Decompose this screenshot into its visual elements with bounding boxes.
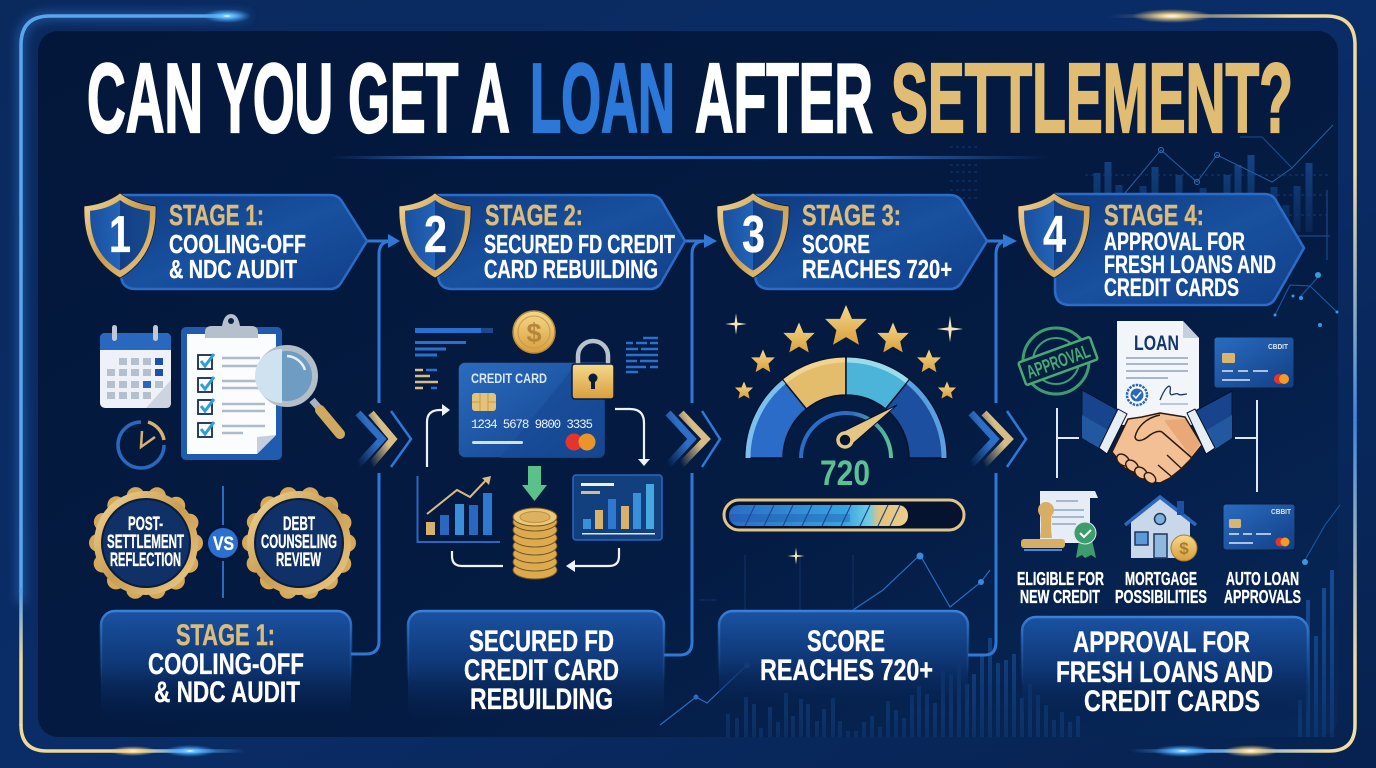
title: AFTER bbox=[695, 43, 873, 153]
icon: magnifier bbox=[255, 348, 340, 434]
brackets bbox=[1057, 400, 1257, 492]
label: eligible for new credit: NEW CREDIT bbox=[1020, 587, 1100, 607]
icon: credit card small top bbox=[1214, 337, 1294, 388]
label: eligible for new credit: ELIGIBLE FOR bbox=[1017, 569, 1104, 589]
icon: calendar bbox=[100, 325, 171, 408]
background network dots bbox=[1274, 272, 1340, 565]
icon: green down arrow bbox=[522, 466, 547, 501]
badge: post-settlement reflection: POST- bbox=[128, 514, 163, 535]
stage 3 header bbox=[717, 193, 987, 289]
icon: clipboard checklist bbox=[181, 314, 282, 460]
chart: rising bars bbox=[418, 476, 500, 542]
badge: debt counseling review bbox=[247, 491, 351, 595]
icon: loan document bbox=[1117, 321, 1199, 425]
panel: stage 2 summary: SECURED FD bbox=[469, 625, 614, 658]
panel: stage 2 summary: REBUILDING bbox=[470, 683, 613, 716]
icon: dollar coin bbox=[513, 311, 555, 353]
icon: approval stamp: APPROVAL bbox=[1024, 341, 1093, 384]
stage 4 header bbox=[1018, 193, 1304, 305]
icon: credit card: CREDIT CARD bbox=[471, 371, 547, 386]
panel: stage 1 summary: COOLING-OFF bbox=[148, 648, 304, 681]
panel: stage 1 summary: STAGE 1: bbox=[176, 619, 275, 652]
panel: stage 4 summary: CREDIT CARDS bbox=[1084, 685, 1260, 718]
label: mortgage possibilities: POSSIBILITIES bbox=[1115, 587, 1207, 607]
label: mortgage possibilities: MORTGAGE bbox=[1125, 569, 1197, 589]
data lines left bbox=[415, 328, 493, 388]
badge: post-settlement reflection: SETTLEMENT bbox=[107, 532, 184, 553]
arrows: rebuilding cycle bbox=[427, 404, 650, 572]
chevrons 3 bbox=[971, 411, 1026, 467]
stage 3 header: 3 bbox=[742, 206, 765, 264]
stage 2 header: 2 bbox=[424, 206, 447, 264]
stage 1 header: & NDC AUDIT bbox=[169, 254, 297, 284]
stage 1 header bbox=[84, 193, 367, 289]
icon: handshake bbox=[1082, 390, 1232, 486]
progress bar bbox=[724, 500, 964, 530]
stage 3 header: REACHES 720+ bbox=[802, 254, 952, 284]
chart: score gauge: 720 bbox=[820, 454, 870, 493]
icon: padlock bbox=[572, 341, 614, 399]
icon: credit card small top: CBDIT bbox=[1268, 344, 1289, 351]
icon: credit card small bottom bbox=[1223, 504, 1295, 550]
icon: house with coin: $ bbox=[1179, 539, 1189, 558]
stage 3 header: STAGE 3: bbox=[802, 200, 901, 232]
icon: certificate stamp bbox=[1021, 491, 1098, 558]
stage 2 header bbox=[399, 193, 685, 289]
stage 2 header: SECURED FD CREDIT bbox=[484, 229, 675, 259]
stage 2 header: CARD REBUILDING bbox=[484, 254, 658, 284]
stage 3 header: SCORE bbox=[802, 229, 870, 259]
vs divider: VS bbox=[213, 534, 234, 555]
data lines right bbox=[626, 338, 658, 372]
stage 4 header: STAGE 4: bbox=[1104, 200, 1204, 232]
icon: approval stamp bbox=[1018, 328, 1098, 394]
stage 4 header: CREDIT CARDS bbox=[1104, 274, 1239, 302]
icon: clock bbox=[118, 422, 164, 468]
stars bbox=[725, 305, 963, 564]
stage 4 header: FRESH LOANS AND bbox=[1104, 251, 1276, 279]
panel: stage 2 summary: CREDIT CARD bbox=[464, 654, 619, 687]
label: mortgage possibilities bbox=[1115, 569, 1207, 607]
title: LOAN bbox=[530, 43, 675, 153]
chevrons 2 bbox=[668, 411, 720, 467]
panel: stage 4 summary: APPROVAL FOR bbox=[1073, 626, 1250, 659]
stage 4 header: APPROVAL FOR bbox=[1104, 228, 1245, 256]
icon: credit card bbox=[458, 362, 605, 458]
icon: house with coin bbox=[1125, 497, 1197, 561]
panel: stage 3 summary: SCORE bbox=[807, 625, 885, 658]
panel: stage 1 summary bbox=[101, 611, 351, 723]
title bbox=[87, 43, 1293, 153]
badge: debt counseling review: REVIEW bbox=[276, 550, 321, 571]
connectors and arrows bbox=[351, 234, 1017, 655]
stage 1 header: COOLING-OFF bbox=[169, 229, 306, 259]
title divider bbox=[330, 156, 1050, 159]
panel: stage 2 summary bbox=[408, 611, 664, 723]
background chart lower right bbox=[660, 552, 1332, 737]
icon: loan document: LOAN bbox=[1134, 332, 1179, 355]
badge: debt counseling review: DEBT bbox=[283, 514, 315, 535]
stage 4 header: 4 bbox=[1043, 206, 1066, 264]
panel: stage 4 summary bbox=[1022, 617, 1308, 722]
icon: coin stack bbox=[513, 508, 557, 579]
stage 1 header: 1 bbox=[109, 206, 131, 264]
badge: post-settlement reflection bbox=[94, 491, 198, 595]
title: CAN YOU GET A bbox=[87, 43, 510, 153]
panel: stage 3 summary: REACHES 720+ bbox=[760, 654, 933, 687]
panel: stage 1 summary: & NDC AUDIT bbox=[154, 676, 300, 709]
label: auto loan approvals: AUTO LOAN bbox=[1226, 569, 1299, 589]
label: auto loan approvals: APPROVALS bbox=[1224, 587, 1301, 607]
chevrons 1 bbox=[358, 411, 411, 467]
label: auto loan approvals bbox=[1224, 569, 1301, 607]
panel: stage 3 summary bbox=[719, 611, 968, 711]
badge: post-settlement reflection: REFLECTION bbox=[110, 550, 181, 571]
label: eligible for new credit bbox=[1017, 569, 1104, 607]
stage 1 header: STAGE 1: bbox=[169, 200, 264, 232]
chart: dashboard panel bbox=[573, 475, 662, 540]
icon: dollar coin: $ bbox=[526, 318, 542, 348]
chart: score gauge bbox=[745, 357, 947, 493]
badge: debt counseling review: COUNSELING bbox=[261, 532, 337, 553]
panel: stage 4 summary: FRESH LOANS AND bbox=[1056, 656, 1273, 689]
icon: credit card: 1234 5678 9800 3335 bbox=[471, 418, 593, 432]
stage 2 header: STAGE 2: bbox=[485, 200, 583, 232]
icon: credit card small bottom: CBBIT bbox=[1271, 509, 1292, 516]
background chart upper right bbox=[950, 125, 1333, 260]
vs divider bbox=[205, 486, 241, 598]
